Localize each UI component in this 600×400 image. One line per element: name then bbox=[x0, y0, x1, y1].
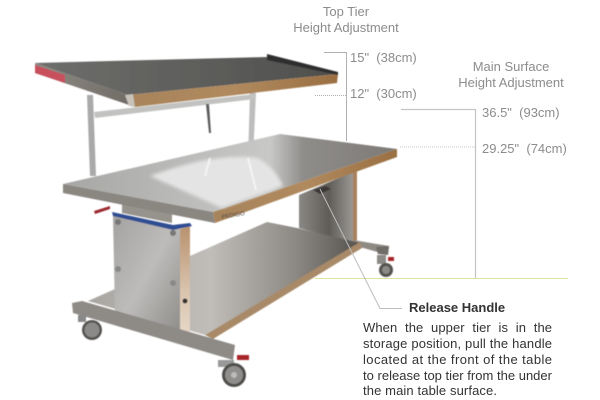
callout body: storage position, pull the handle bbox=[363, 336, 552, 351]
callout body: located at the front of the table bbox=[363, 352, 552, 367]
left leg column bbox=[113, 215, 190, 335]
red label bbox=[35, 65, 65, 83]
top tier dimension lines bbox=[315, 52, 346, 141]
callout body: When the upper tier is in the bbox=[363, 320, 552, 335]
table illustration bbox=[35, 54, 397, 387]
label: 12 in: 12" (30cm) bbox=[350, 86, 417, 101]
right caster bbox=[377, 255, 394, 277]
brand text: PEDIGO bbox=[221, 211, 246, 221]
base rail bbox=[72, 301, 235, 360]
label: 36.5 in: 36.5" (93cm) bbox=[482, 105, 560, 120]
main surface dimension lines bbox=[400, 110, 476, 278]
heading: main surface: Main Surface bbox=[473, 59, 549, 74]
front caster bbox=[218, 355, 249, 387]
callout body: the main table surface. bbox=[363, 383, 497, 398]
top tier bbox=[35, 54, 338, 107]
right leg column bbox=[299, 168, 389, 255]
callout heading: Release Handle bbox=[409, 300, 505, 315]
callout body: to release top tier from the under bbox=[363, 368, 553, 383]
release handle bbox=[313, 186, 331, 194]
red lever bbox=[94, 206, 110, 214]
callout body bbox=[363, 320, 553, 398]
heading: main surface line 2: Height Adjustment bbox=[458, 75, 564, 90]
heading: top tier: Top Tier bbox=[323, 4, 370, 19]
heading: top tier line 2: Height Adjustment bbox=[293, 20, 399, 35]
lower shelf bbox=[88, 222, 362, 339]
left rear caster bbox=[78, 315, 102, 340]
ground line bbox=[315, 278, 568, 280]
label: 29.25 in: 29.25" (74cm) bbox=[482, 141, 567, 156]
label: 15 in: 15" (38cm) bbox=[350, 50, 417, 65]
rear posts bbox=[87, 93, 256, 176]
release handle leader line bbox=[320, 189, 402, 308]
main table surface bbox=[63, 134, 397, 223]
blue bracket bbox=[112, 204, 192, 230]
